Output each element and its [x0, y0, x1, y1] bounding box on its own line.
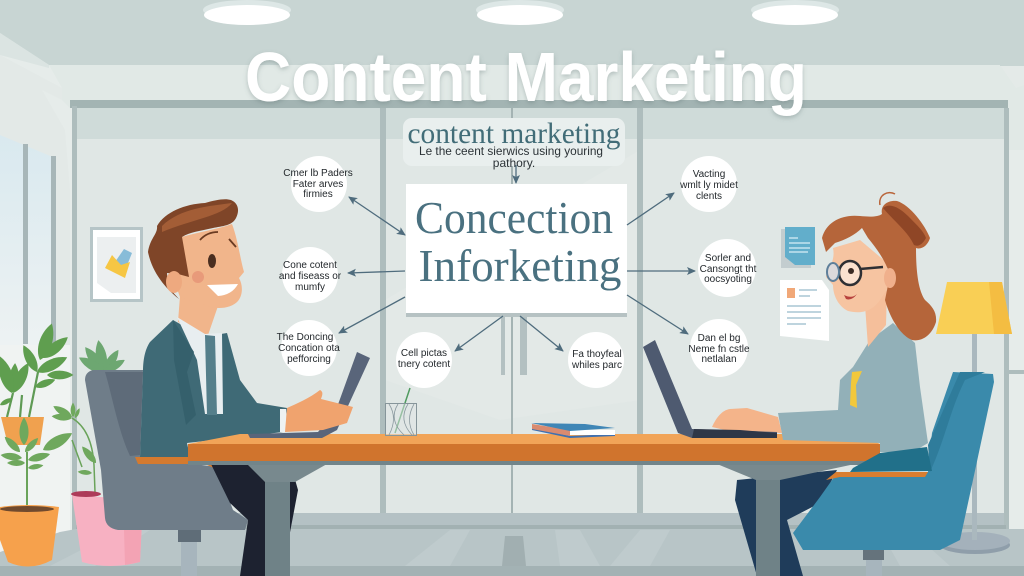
trousers [210, 462, 298, 576]
bubble: bottom left: Cell pictas [401, 348, 447, 359]
bubble: top left [283, 156, 353, 212]
blue sticky note [781, 227, 815, 268]
whiteboard heading line 1: Concection [415, 192, 613, 243]
bubble: top left: firmies [303, 189, 333, 200]
glass with straw [386, 388, 416, 436]
suit [140, 320, 287, 457]
bubble: top right [679, 156, 738, 212]
neck [178, 296, 218, 338]
tie [205, 335, 217, 415]
bubble: lower right: Dan el bg [698, 333, 740, 344]
bubble: bottom left: tnery cotent [398, 359, 450, 370]
stack of books [531, 423, 615, 438]
lapel [173, 320, 196, 425]
glasses [860, 267, 883, 269]
mouth [844, 294, 857, 299]
shirt [177, 317, 223, 414]
central whiteboard [406, 184, 627, 375]
face [170, 224, 244, 308]
ear [884, 268, 896, 288]
whiteboard heading line 2: Inforketing [418, 240, 622, 291]
hair bun [883, 206, 926, 246]
wall picture [90, 227, 143, 302]
skirt [850, 447, 932, 472]
bubble: lower left: pefforcing [287, 354, 331, 365]
caption body: Le the ceent sierwics using youring [419, 144, 603, 158]
bubble: middle right: oocsyoting [704, 274, 752, 285]
arrows from whiteboard [339, 165, 695, 351]
tablet and hand: man [248, 352, 370, 438]
chair: woman [735, 372, 994, 576]
face [826, 240, 890, 312]
bubble: bottom right: whiles parc [571, 360, 622, 371]
plant: front orange pot [0, 417, 59, 567]
title: Content Marketing [245, 38, 807, 116]
bubble: middle left: mumfy [295, 282, 325, 293]
bubble: middle left [279, 247, 342, 303]
bubble: middle left: Cone cotent [283, 260, 337, 271]
blouse [778, 323, 928, 452]
ceiling light: centre [476, 0, 564, 25]
cheek [192, 271, 204, 283]
bubble: lower left: Concation ota [278, 343, 340, 354]
bubble: middle right: Sorler and [705, 253, 751, 264]
top caption card [403, 117, 625, 170]
bubble: middle right [698, 239, 757, 297]
conference table [188, 434, 880, 576]
man [140, 199, 298, 576]
bubble: top right: wmlt ly midet [679, 180, 738, 191]
bubble: lower right [688, 319, 750, 377]
bubble: top left: Fater arves [293, 179, 343, 190]
bubble: lower right: Neme fn cstle [688, 344, 750, 355]
plant: window pot [0, 322, 73, 445]
bubble: top right: clents [696, 191, 722, 202]
hand [712, 408, 782, 433]
bubble: bottom right: Fa thoyfeal [572, 349, 622, 360]
laptop: woman [643, 340, 777, 438]
ear [166, 271, 182, 293]
bubble: middle right: Cansongt tht [700, 264, 757, 275]
bubble: lower left [277, 320, 340, 376]
hair [822, 201, 936, 340]
ceiling light: left [203, 0, 291, 25]
smile [207, 284, 238, 296]
bubble: top left: Cmer lb Paders [283, 168, 353, 179]
bubble: bottom left [396, 332, 452, 388]
neck [865, 290, 887, 347]
bubble: bottom right [568, 332, 624, 388]
ceiling light: right [751, 0, 839, 25]
yellow pendant [850, 371, 862, 408]
woman [712, 193, 936, 472]
bubble: top right: Vacting [693, 169, 725, 180]
caption heading: content marketing [408, 117, 620, 150]
bubble: middle left: and fiseass or [279, 271, 342, 282]
chair: man [85, 370, 248, 576]
plant: large pink pot [40, 339, 143, 566]
paper document [780, 280, 829, 341]
bubble: lower right: netlalan [701, 354, 737, 365]
floor lamp [936, 282, 1012, 554]
hair [148, 199, 238, 299]
eye and brows [200, 232, 236, 247]
caption body: pathory. [493, 156, 535, 170]
bubble: lower left: The Doncing [277, 332, 333, 343]
